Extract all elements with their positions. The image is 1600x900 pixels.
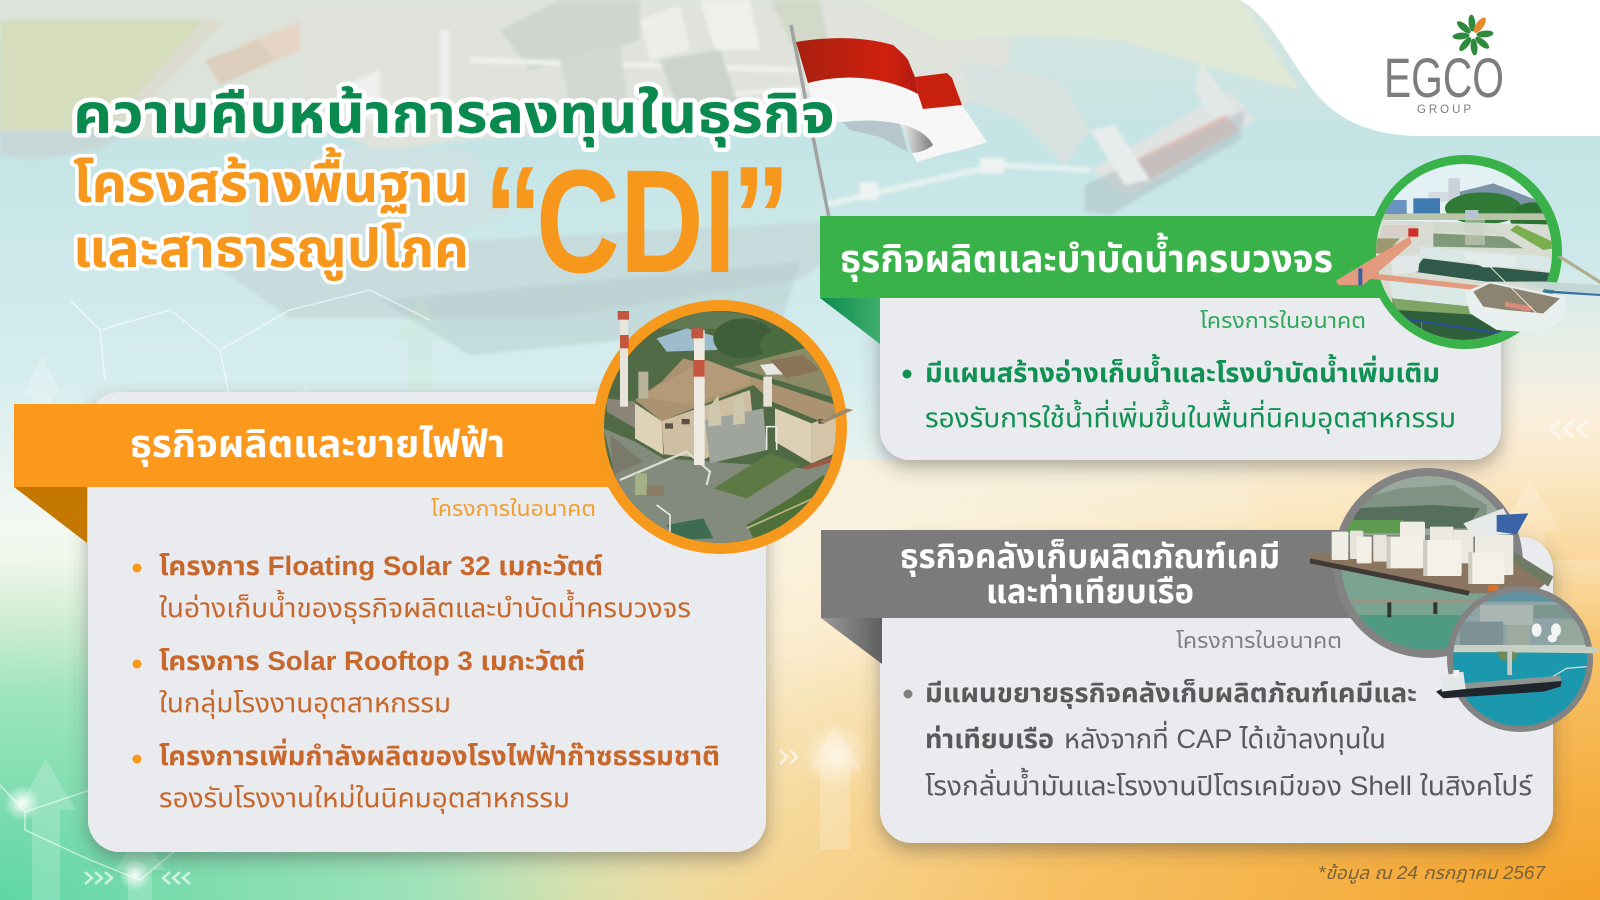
bullet list: โครงการ Solar Rooftop 3 เมกะวัตต์ (159, 646, 585, 676)
bullet text (902, 354, 1456, 434)
bullet list: ในอ่างเก็บน้ำของธุรกิจผลิตและบำบัดน้ำครบวงจร (159, 589, 691, 624)
heading ribbon: ธุรกิจผลิตและขายไฟฟ้า (130, 424, 505, 467)
card (880, 537, 1553, 843)
title: “ (484, 136, 542, 298)
heading ribbon (820, 216, 1400, 298)
photo: chemical storage tanks (1310, 468, 1553, 658)
title: ” (732, 136, 790, 298)
bullet list: โครงการ Floating Solar 32 เมกะวัตต์ (159, 551, 603, 581)
bullet list: ในกลุ่มโรงงานอุตสาหกรรม (159, 688, 451, 719)
right land and jetty (860, 0, 1300, 90)
heading ribbon (14, 404, 634, 487)
EGCO Group logo: EGCO (1384, 46, 1504, 109)
bullet text: มีแผนสร้างอ่างเก็บน้ำและโรงบำบัดน้ำเพิ่มเติม (925, 354, 1440, 388)
ribbon fold (14, 487, 87, 543)
industrial area (300, 0, 1010, 150)
faint arrows and network lines (16, 298, 1560, 900)
label: future projects: โครงการในอนาคต (1200, 310, 1366, 333)
bullet list (132, 551, 720, 814)
icon: leaf flower (1452, 14, 1494, 56)
ribbon fold (820, 298, 880, 344)
ribbon fold (821, 618, 882, 664)
moored ship, upper right (1090, 90, 1255, 195)
photo: water treatment plant (1336, 150, 1600, 357)
bullet text: โรงกลั่นน้ำมันและโรงงานปิโตรเคมีของ Shell ในสิงคโปร์ (925, 767, 1533, 801)
heading ribbon: ธุรกิจผลิตและบำบัดน้ำครบวงจร (840, 232, 1333, 282)
bullet list: รองรับโรงงานใหม่ในนิคมอุตสาหกรรม (159, 783, 570, 814)
footnote: *ข้อมูล ณ 24 กรกฎาคม 2567 (1318, 863, 1546, 884)
bullet list: โครงการเพิ่มกำลังผลิตของโรงไฟฟ้าก๊าซธรรมชาติ (159, 739, 720, 771)
bullet text: หลังจากที่ CAP ได้เข้าลงทุนใน (1064, 720, 1386, 755)
bullet text (904, 678, 1533, 801)
title: ความคืบหน้าการลงทุนในธุรกิจ (73, 83, 835, 147)
bullet text: ท่าเทียบเรือ (925, 724, 1054, 754)
panel: electricity business (14, 295, 860, 852)
title: และสาธารณูปโภค (73, 220, 469, 281)
photo: gas power plant (590, 295, 860, 560)
card (88, 392, 766, 852)
EGCO Group logo (1384, 14, 1504, 116)
title (73, 83, 835, 304)
card (880, 250, 1501, 460)
panel: water business (820, 150, 1600, 460)
heading ribbon (821, 530, 1351, 618)
land, top left (0, 0, 560, 140)
label: future projects: โครงการในอนาคต (431, 498, 596, 521)
bullet text: รองรับการใช้น้ำที่เพิ่มขึ้นในพื้นที่นิคมอุตสาหกรรม (925, 399, 1456, 434)
heading ribbon: และท่าเทียบเรือ (986, 573, 1194, 611)
label: future projects: โครงการในอนาคต (1176, 630, 1342, 653)
photo: tanker ship at port (1436, 585, 1600, 732)
ghost ship at centre (200, 222, 860, 318)
logo corner: white curved panel (1240, 0, 1600, 136)
panel: chemical storage and port business (821, 468, 1600, 843)
bullet text: มีแผนขยายธุรกิจคลังเก็บผลิตภัณฑ์เคมีและ (925, 678, 1417, 709)
EGCO Group logo: GROUP (1417, 104, 1471, 116)
title: โครงสร้างพื้นฐาน (73, 147, 469, 214)
icon: Indonesian flag on a pole (791, 25, 987, 218)
heading ribbon: ธุรกิจคลังเก็บผลิตภัณฑ์เคมี (900, 538, 1280, 577)
title: CDI (536, 140, 736, 304)
